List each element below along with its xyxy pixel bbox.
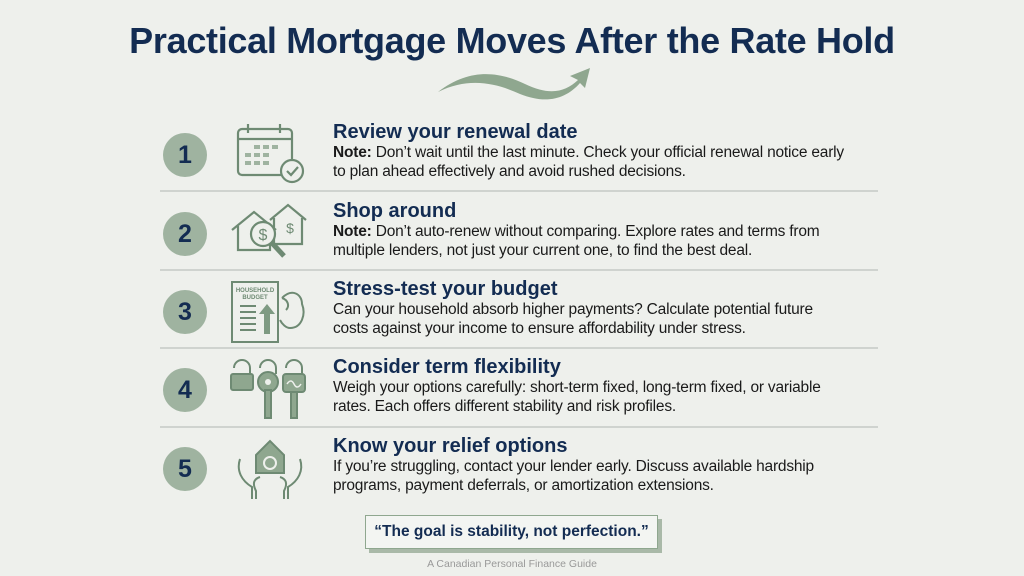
text 4: Weigh your options carefully: short-term fixed, long-term fixed, or variable [333,379,821,396]
number 2 [163,212,207,256]
icon: calendar [236,124,304,184]
callout: quote: “The goal is stability, not perfection.” [374,523,649,540]
text 1: Note: Don’t wait until the last minute. Check your official renewal notice early [333,144,844,161]
icon: budget with muscle: BUDGET [242,295,268,301]
number 5 [163,447,207,491]
number 3: 3 [178,298,192,326]
footer: A Canadian Personal Finance Guide [427,558,597,570]
title: Practical Mortgage Moves After the Rate Hold [129,20,895,61]
text 1: to plan ahead effectively and avoid rushed decisions. [333,162,686,180]
text 3: Stress-test your budget [333,278,557,300]
text 3 [333,278,813,336]
icon: locks and keys [230,359,306,419]
text 3: Can your household absorb higher payments? Calculate potential future [333,301,813,318]
text 4: Consider term flexibility [333,356,561,378]
number 5: 5 [178,455,192,483]
text 5: Know your relief options [333,435,567,457]
text 5: If you’re struggling, contact your lender early. Discuss available hardship [333,458,814,475]
icon: houses with magnifier [231,204,307,258]
text 1 [333,121,844,180]
number 3 [163,290,207,334]
number 1 [163,133,207,177]
text 2: Shop around [333,200,456,222]
row 2 [163,200,820,258]
row 4 [163,356,821,419]
icon: hands with house [238,440,302,499]
text 1: Review your renewal date [333,121,578,143]
text 2: multiple lenders, not just your current one, to find the best deal. [333,242,752,258]
text 4: rates. Each offers different stability and risk profiles. [333,398,676,414]
text 3: costs against your income to ensure affordability under stress. [333,320,746,336]
number 4 [163,368,207,412]
number 2: 2 [178,220,192,248]
row 5 [163,435,814,499]
text 2: Note: Don’t auto-renew without comparing. Explore rates and terms from [333,223,820,240]
icon: houses with magnifier: $ [259,227,268,244]
text 5 [333,435,814,494]
row 3 [163,278,813,343]
number 4: 4 [178,376,192,404]
text 2 [333,200,820,258]
row 1 [163,121,844,184]
icon: budget with muscle: HOUSEHOLD [236,288,275,294]
icon: budget with muscle [231,281,305,343]
number 1: 1 [178,141,192,169]
arrow: swoosh [438,68,590,100]
callout: quote [365,515,658,549]
text 5: programs, payment deferrals, or amortization extensions. [333,476,714,494]
text 4 [333,356,821,414]
icon: houses with magnifier: $ [286,220,294,236]
